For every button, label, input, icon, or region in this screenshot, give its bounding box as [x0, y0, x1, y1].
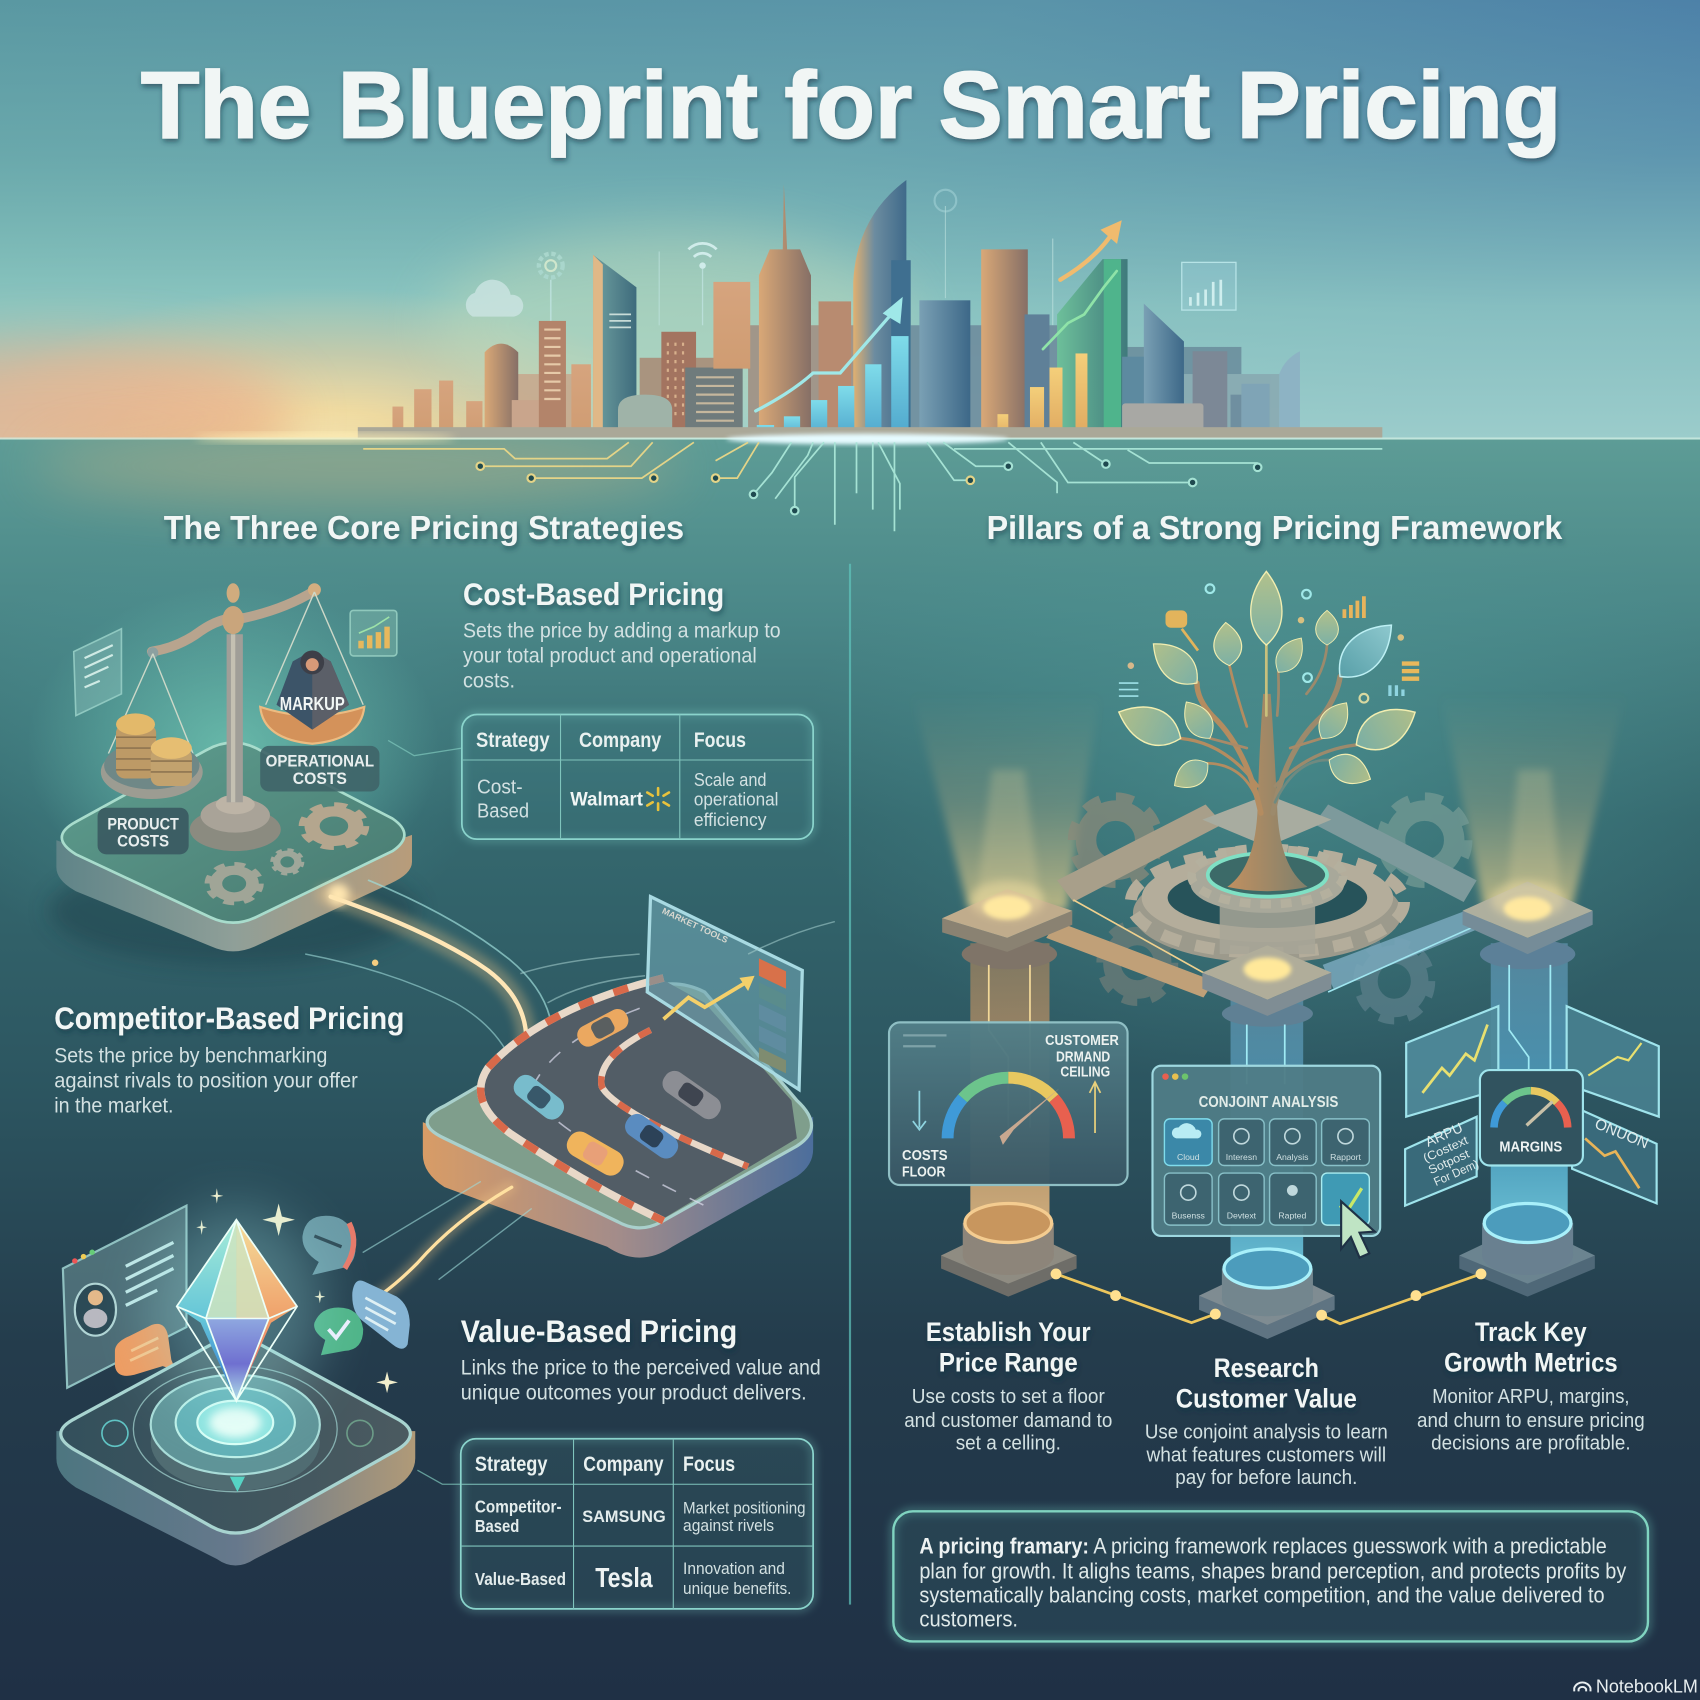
- title: The Blueprint for Smart Pricing: [141, 53, 1561, 158]
- column divider: [849, 564, 851, 1605]
- background: sky: [0, 0, 1700, 613]
- cars: [509, 1006, 725, 1180]
- strategy: cost-based text: Cost-Based Pricing: [463, 577, 724, 612]
- floating tree icons: [1119, 584, 1419, 703]
- logo: Tesla: Tesla: [595, 1561, 653, 1593]
- ARPU card: (Costext: [1421, 1133, 1471, 1165]
- tree: [1112, 571, 1424, 891]
- skyline buildings: [392, 180, 1300, 438]
- pillar text: price range: Use costs to set a floor: [912, 1385, 1105, 1408]
- conjoint tiles: [1164, 1119, 1369, 1225]
- strategy: cost-based text: [463, 577, 781, 692]
- panel: conjoint analysis: [1152, 1066, 1380, 1258]
- panel: conjoint analysis: Busenss: [1172, 1211, 1206, 1221]
- race track: [481, 978, 797, 1221]
- panel: conjoint analysis: Interesn: [1226, 1152, 1257, 1162]
- callout: summary box: systematically balancing costs, market competition, and the value delivered to: [919, 1582, 1605, 1607]
- table: cost-based: [462, 714, 813, 839]
- table: cost-based: Cost-: [477, 776, 523, 799]
- skyline base: [358, 427, 1382, 438]
- horizon glow: [0, 434, 1700, 445]
- background: lower gradient: [0, 429, 1700, 1700]
- pillar text: customer value: Research: [1214, 1352, 1319, 1383]
- margins card: MARGINS: [1499, 1139, 1563, 1155]
- table: competitor and value: Competitor-: [475, 1496, 562, 1516]
- strategy: competitor text: Competitor-Based Pricing: [54, 1001, 404, 1036]
- panel: gauge: CEILING: [1060, 1064, 1110, 1081]
- table: cost-based: operational: [694, 789, 778, 810]
- panel: gauge: COSTS: [902, 1147, 948, 1164]
- pillar text: customer value: what features customers will: [1146, 1443, 1386, 1466]
- light beams: [912, 694, 1625, 911]
- billboard: MARKET TOOLS: [661, 906, 730, 945]
- right scale pan with markup weight: [260, 592, 364, 744]
- pillar text: growth metrics: and churn to ensure pricing: [1417, 1409, 1645, 1432]
- section heading: pillars: Pillars of a Strong Pricing Framework: [987, 510, 1563, 547]
- churn card: [1572, 1106, 1657, 1203]
- callout: summary box: [893, 1511, 1648, 1641]
- table: competitor and value: [461, 1439, 813, 1609]
- panel: conjoint analysis: Devtext: [1227, 1211, 1257, 1221]
- arrow: glowing path competitor to value: [363, 1182, 531, 1296]
- panel: gauge: [889, 1022, 1128, 1185]
- strategy: cost-based text: Sets the price by adding a markup to: [463, 617, 781, 642]
- panel: conjoint analysis: Analysis: [1276, 1152, 1309, 1162]
- table: competitor and value: Innovation and: [683, 1559, 785, 1578]
- gauge labels: CUSTOMER: [1045, 1032, 1119, 1049]
- skyline icons: [466, 190, 1236, 325]
- label: operational costs: COSTS: [293, 770, 347, 788]
- panel: competitor race track illustration: [423, 897, 835, 1258]
- table: competitor and value: Market positioning: [683, 1499, 806, 1518]
- pillar text: price range: Establish Your: [926, 1316, 1091, 1347]
- label: markup: MARKUP: [280, 693, 345, 714]
- panel: gauge: DRMAND: [1056, 1048, 1110, 1065]
- motion lines: [520, 922, 835, 1003]
- pillar text: growth metrics: [1417, 1316, 1645, 1455]
- chart card right: [1567, 1006, 1659, 1117]
- icon: cursor: [1341, 1201, 1375, 1258]
- panel: conjoint analysis: Rapport: [1330, 1152, 1361, 1162]
- logo: Samsung: SAMSUNG: [582, 1508, 666, 1526]
- pillar text: price range: and customer damand to: [904, 1409, 1112, 1432]
- strategy: value-based text: Links the price to the perceived value and: [461, 1355, 821, 1380]
- pillar text: growth metrics: Growth Metrics: [1444, 1346, 1618, 1377]
- leaves: [1112, 571, 1424, 796]
- connector: gem to table: [417, 1470, 461, 1484]
- chart card: [1406, 1006, 1498, 1117]
- billboard: [647, 897, 802, 1090]
- connecting gold chain: [1051, 1268, 1486, 1324]
- pillar text: growth metrics: Track Key: [1475, 1316, 1587, 1347]
- scale stand: [147, 583, 321, 851]
- pillar text: growth metrics: Monitor ARPU, margins,: [1432, 1385, 1630, 1408]
- gauge dial: [948, 1078, 1069, 1138]
- table: cost-based: efficiency: [694, 809, 767, 830]
- pillar text: customer value: Customer Value: [1176, 1382, 1357, 1413]
- label: product costs: PRODUCT: [107, 815, 179, 833]
- connector: scale to table: [388, 740, 462, 756]
- icon: gears: [210, 807, 362, 901]
- table: cost-based: Strategy: [476, 727, 550, 752]
- table: competitor and value: Based: [475, 1516, 519, 1536]
- panel: conjoint analysis: Cloud: [1177, 1152, 1200, 1162]
- strategy: competitor text: Sets the price by benchmarking: [54, 1042, 327, 1067]
- panel: value-based gem illustration: [56, 1188, 415, 1566]
- pillar text: growth metrics: decisions are profitable.: [1431, 1432, 1631, 1455]
- table: cost-based: Scale and: [694, 769, 767, 790]
- panel: gauge: FLOOR: [902, 1163, 945, 1180]
- skyline growth arrows: [756, 221, 1121, 411]
- table: competitor and value: Focus: [683, 1451, 735, 1476]
- logo: Walmart: Walmart: [570, 789, 643, 811]
- label: product costs: [98, 808, 189, 854]
- ARPU card: ARPU: [1423, 1119, 1465, 1150]
- churn card: ONUON: [1592, 1115, 1651, 1152]
- label: operational costs: [260, 746, 379, 791]
- platform: [423, 984, 813, 1258]
- pillar text: price range: [904, 1316, 1112, 1455]
- strategy: competitor text: against rivals to position your offer: [54, 1067, 358, 1092]
- panel: cost-based scale illustration: [27, 583, 439, 965]
- label: product costs: COSTS: [117, 833, 169, 851]
- arrow: glowing path cost to competitor: [306, 880, 553, 1057]
- left scale pan with coins: [101, 654, 203, 799]
- strategy: value-based text: Value-Based Pricing: [461, 1314, 737, 1349]
- pillar bases: [941, 1203, 1595, 1339]
- frame beams: [1046, 804, 1491, 997]
- pillar text: customer value: [1145, 1352, 1388, 1489]
- section heading: strategies: The Three Core Pricing Strategies: [164, 510, 684, 547]
- pillar text: price range: set a celling.: [956, 1432, 1061, 1455]
- table: competitor and value: Company: [583, 1451, 664, 1476]
- strategy: competitor text: [54, 1001, 404, 1117]
- ARPU card: [1405, 1117, 1481, 1206]
- callout: summary box: A pricing framary: A pricing framework replaces guesswork with a predictable: [919, 1534, 1607, 1559]
- skyline back layer: [515, 325, 1279, 438]
- trunk and branches: [1181, 645, 1356, 891]
- ARPU card: For Dem): [1431, 1157, 1481, 1189]
- background gears: [1077, 802, 1463, 1016]
- icon: value gem: [150, 1209, 323, 1415]
- city skyline illustration: [358, 180, 1382, 438]
- circuit lines: [363, 442, 1382, 531]
- platform: [49, 743, 417, 965]
- pillar text: customer value: Use conjoint analysis to learn: [1145, 1421, 1388, 1444]
- skyline bar chart: [757, 336, 1087, 438]
- platform: [56, 1338, 415, 1566]
- table: cost-based: Company: [579, 727, 661, 752]
- ARPU card: Sotpost: [1426, 1146, 1472, 1177]
- panel: conjoint analysis: Rapted: [1278, 1211, 1306, 1221]
- window card: [63, 1206, 186, 1388]
- teal glow backdrop: [27, 585, 439, 911]
- panel: growth metrics cards: [1405, 1006, 1659, 1206]
- strategy: cost-based text: your total product and operational: [463, 642, 757, 667]
- table: competitor and value: unique benefits.: [683, 1579, 791, 1598]
- callout: summary box: customers.: [919, 1606, 1018, 1631]
- conjoint title: CONJOINT ANALYSIS: [1199, 1094, 1338, 1111]
- pillars: [962, 939, 1575, 1290]
- pillar text: price range: Price Range: [939, 1346, 1078, 1377]
- table: competitor and value: Value-Based: [475, 1569, 566, 1589]
- panel: pillars framework illustration: [889, 571, 1659, 1339]
- pillar text: customer value: pay for before launch.: [1175, 1466, 1357, 1489]
- logo: NotebookLM: NotebookLM: [1596, 1675, 1698, 1696]
- top frame node: [1202, 795, 1331, 847]
- table: competitor and value: Strategy: [475, 1451, 548, 1476]
- sparkles: [196, 1188, 398, 1393]
- strategy: competitor text: in the market.: [54, 1092, 173, 1117]
- pedestal with glow: [102, 1366, 373, 1492]
- central gear ring: [1131, 848, 1404, 963]
- speech bubbles: [115, 1216, 410, 1376]
- table: cost-based: Focus: [694, 727, 746, 752]
- icon: document card: [74, 629, 121, 716]
- frame nodes: [942, 880, 1593, 1016]
- margins card: [1480, 1070, 1583, 1165]
- callout: summary box: plan for growth. It alighs teams, shapes brand perception, and protects profits by: [919, 1559, 1627, 1584]
- label: operational costs: OPERATIONAL: [266, 753, 374, 771]
- table: cost-based: Based: [477, 799, 529, 822]
- table: competitor and value: against rivels: [683, 1516, 774, 1535]
- strategy: value-based text: unique outcomes your product delivers.: [461, 1380, 807, 1405]
- strategy: value-based text: [461, 1314, 821, 1405]
- strategy: cost-based text: costs.: [463, 667, 515, 692]
- icon: bar chart card: [350, 610, 397, 656]
